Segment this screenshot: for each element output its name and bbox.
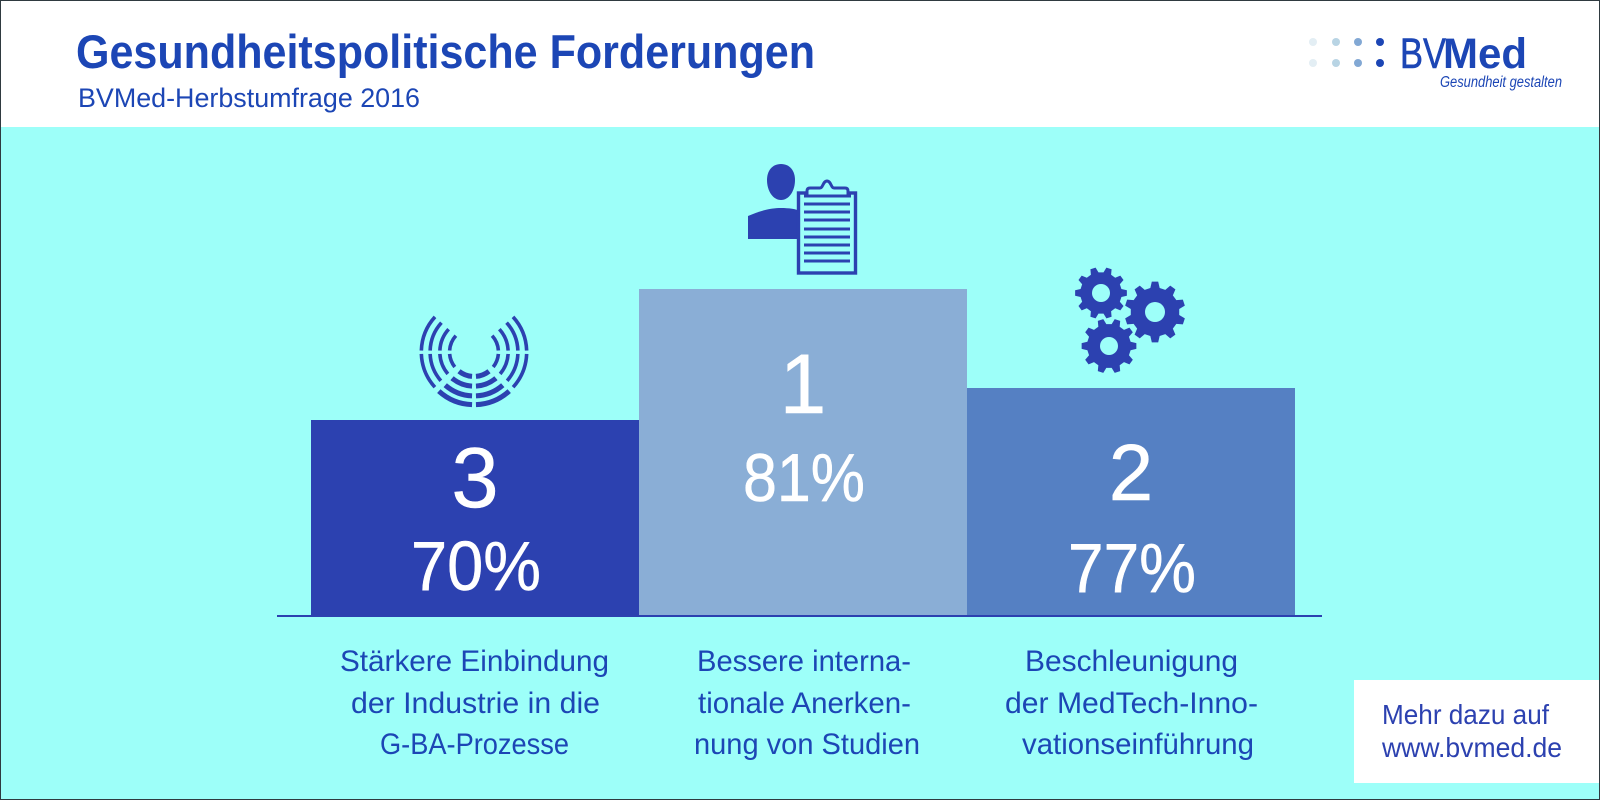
bar: rank 1: 81% <box>743 440 865 516</box>
label: rank 3: G-BA-Prozesse <box>380 728 569 761</box>
label: rank 1: tionale Anerken- <box>698 687 911 720</box>
label: rank 2: vationseinführung <box>1022 728 1254 761</box>
bar: rank 1: 1 <box>780 337 826 431</box>
label: rank 2: der MedTech-Inno- <box>1005 687 1258 720</box>
subtitle: BVMed-Herbstumfrage 2016 <box>78 83 420 113</box>
header band <box>0 0 1600 127</box>
label: rank 3: Stärkere Einbindung <box>340 645 609 678</box>
label: rank 2: Beschleunigung <box>1025 645 1238 678</box>
logo: BVMed <box>1309 30 1562 91</box>
icon: person with clipboard <box>748 164 856 273</box>
label: rank 1 <box>694 645 920 761</box>
label: rank 1: nung von Studien <box>694 728 920 761</box>
callout: website: Mehr dazu auf <box>1382 699 1549 730</box>
title: Gesundheitspolitische Forderungen <box>76 25 815 78</box>
bar: rank 3: 70% <box>411 527 541 605</box>
icon: parliament seating <box>421 317 527 405</box>
logo: BVMed: Med <box>1443 30 1527 78</box>
bar: rank 1 <box>639 289 967 617</box>
label: rank 2 <box>1005 645 1258 761</box>
label: rank 3: der Industrie in die <box>351 687 600 720</box>
label: rank 1: Bessere interna- <box>697 645 911 678</box>
callout: website <box>1354 680 1600 783</box>
bar: rank 2: 77% <box>1068 529 1196 607</box>
bar: rank 3 <box>311 420 639 617</box>
callout: website: www.bvmed.de <box>1381 732 1562 763</box>
bar: rank 2: 2 <box>1109 428 1153 517</box>
baseline <box>277 615 1322 617</box>
logo: BVMed: BV <box>1400 30 1446 78</box>
bar: rank 3: 3 <box>451 431 499 526</box>
bar: rank 2 <box>967 388 1295 617</box>
label: rank 3 <box>340 645 609 761</box>
logo: BVMed: Gesundheit gestalten <box>1440 74 1562 91</box>
icon: gears <box>1075 268 1193 373</box>
